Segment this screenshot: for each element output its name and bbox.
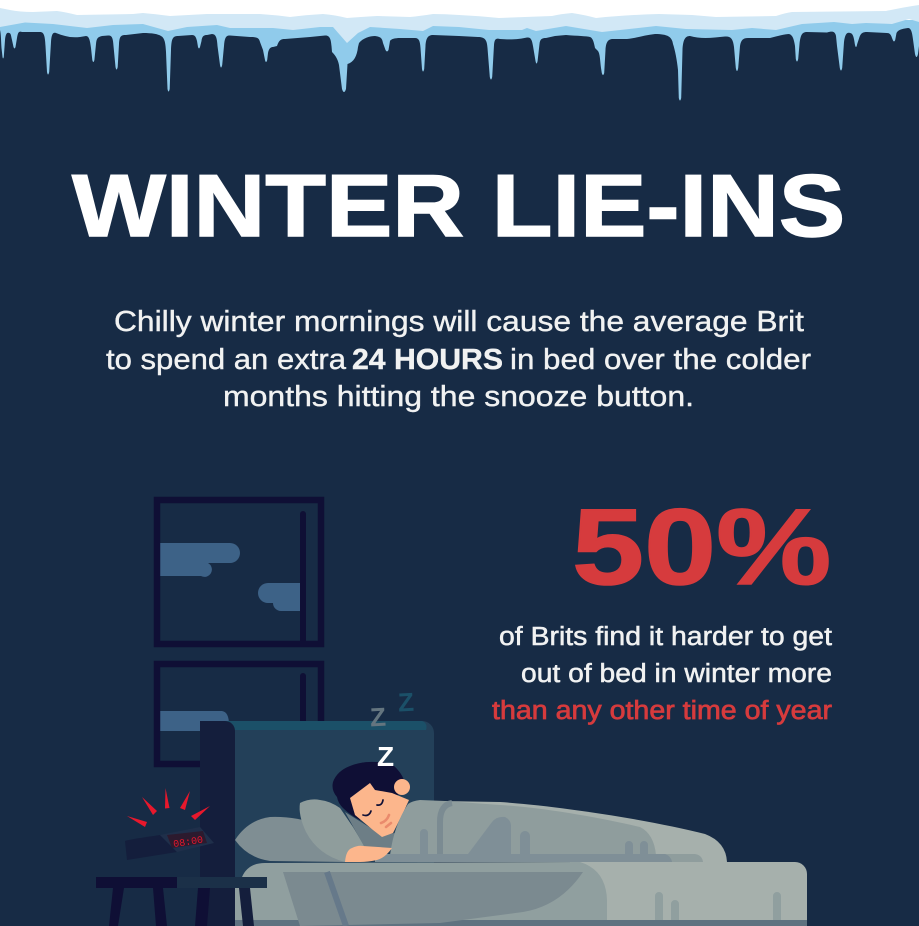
statistic description: than any other time of year bbox=[492, 697, 833, 725]
statistic description: of Brits find it harder to get bbox=[499, 623, 832, 651]
statistic 50%: 50% bbox=[572, 487, 831, 608]
intro text: 24 HOURS bbox=[352, 344, 503, 376]
bed front bbox=[235, 862, 807, 926]
intro text: to spend an extra bbox=[106, 344, 347, 376]
intro text: in bed over the colder bbox=[510, 344, 811, 376]
front pillow bbox=[300, 799, 365, 862]
snooze letters: Z bbox=[369, 702, 387, 732]
title: WINTER LIE-INS bbox=[72, 156, 845, 255]
bedside table bbox=[96, 877, 267, 926]
window lower bbox=[157, 664, 321, 764]
snooze letters bbox=[369, 687, 415, 772]
alarm clock: 08:00 bbox=[173, 836, 204, 851]
intro text: Chilly winter mornings will cause the average Brit bbox=[114, 306, 804, 338]
blanket bbox=[375, 800, 727, 862]
intro text bbox=[106, 306, 811, 413]
intro text: months hitting the snooze button. bbox=[223, 381, 694, 413]
hand bbox=[345, 846, 392, 862]
alarm clock bbox=[125, 827, 214, 860]
statistic description: out of bed in winter more bbox=[521, 660, 832, 688]
window upper bbox=[157, 500, 321, 645]
alarm ringing rays bbox=[127, 788, 210, 827]
back pillow bbox=[235, 817, 345, 862]
snooze letters: Z bbox=[397, 687, 415, 717]
icicles and snow header bbox=[0, 0, 919, 100]
sleeping person bbox=[332, 762, 410, 849]
snooze letters: Z bbox=[377, 741, 394, 772]
headboard bbox=[200, 721, 434, 926]
statistic description bbox=[492, 623, 833, 725]
